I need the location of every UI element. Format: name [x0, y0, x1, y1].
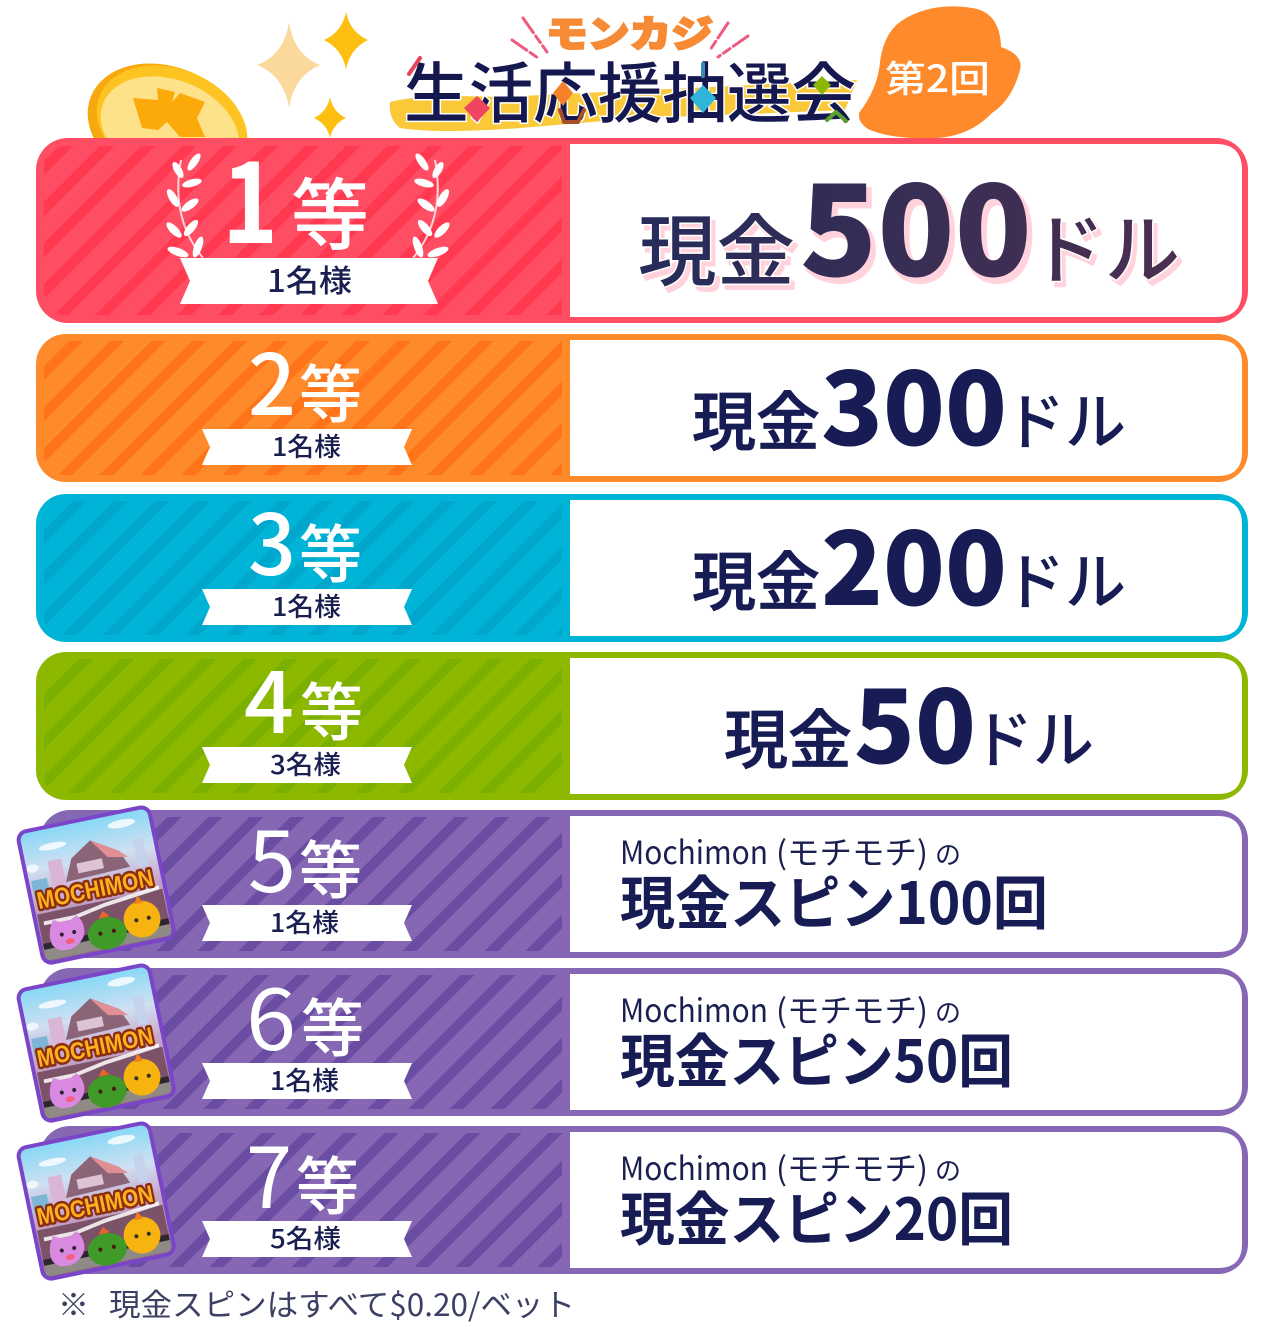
panel: 4th prize: 3名様: [270, 745, 341, 782]
panel: 4th prize: 50: [854, 647, 976, 792]
panel: 3rd prize: 200: [821, 489, 1007, 634]
game thumbnail: [17, 964, 175, 1122]
panel: 2nd prize: 2: [248, 319, 296, 440]
panel: 7th prize: の: [935, 1151, 961, 1188]
game thumbnail: [17, 806, 175, 964]
panel: 7th prize: 7: [246, 1112, 292, 1233]
panel: 1st prize: 1名様: [267, 256, 352, 301]
panel: 5th prize: 5: [248, 796, 296, 917]
prize: 500: [804, 137, 1036, 317]
panel: 5th prize: [17, 796, 1248, 964]
brush stroke behind title: [390, 80, 857, 131]
prize: ドル: [1030, 189, 1180, 299]
panel: 7th prize: Mochimon: [620, 1144, 768, 1190]
coin illustration: [88, 64, 248, 138]
panel: 3rd prize: 1名様: [272, 587, 341, 624]
footnote: ※: [58, 1280, 89, 1325]
panel: 7th prize: 現金スピン20回: [620, 1173, 1013, 1257]
panel: 4th prize: ドル: [972, 690, 1094, 780]
coloured accents on title strokes: [409, 58, 846, 122]
panel: 6th prize: Mochimon: [620, 986, 768, 1032]
panel: 3rd prize: ドル: [1004, 532, 1126, 622]
diamonds: [464, 96, 490, 122]
sparkles: [257, 12, 368, 138]
panel: 3rd prize: 現金: [692, 532, 820, 624]
panel: 6th prize: の: [935, 993, 961, 1030]
panel: 2nd prize: 等: [299, 345, 362, 436]
prize: ドル: [1034, 194, 1184, 304]
panel: 1st prize: [36, 115, 1248, 323]
panel: 2nd prize: [36, 319, 1248, 482]
panel: 5th prize: 1名様: [270, 903, 339, 940]
panel: 3rd prize: 3: [248, 479, 296, 600]
panel: 4th prize: 現金: [724, 690, 852, 782]
panel: 4th prize: [36, 637, 1248, 800]
panel: 5th prize: 現金スピン100回: [620, 857, 1048, 941]
panel: 2nd prize: 現金: [692, 372, 820, 464]
brand name: モンカジ: [546, 4, 713, 58]
panel: 5th prize: の: [935, 835, 961, 872]
game thumbnail: MOCHIMON: [35, 1181, 156, 1231]
panel: 6th prize: 等: [301, 979, 364, 1070]
prize: 現金: [638, 190, 795, 302]
panel: 6th prize: 1名様: [270, 1061, 339, 1098]
prize: 現金: [642, 195, 799, 307]
panel: 4th prize: 4: [244, 637, 294, 758]
rank: 1: [222, 115, 278, 275]
game thumbnail: MOCHIMON: [35, 865, 156, 915]
panel: 3rd prize: [36, 479, 1248, 642]
panel: 1st prize: 等: [291, 154, 369, 266]
panel: 2nd prize: 1名様: [272, 427, 341, 464]
panel: 6th prize: [17, 954, 1248, 1122]
panel: 6th prize: (モチモチ): [776, 986, 928, 1032]
game thumbnail: MOCHIMON: [35, 1023, 156, 1073]
rays: [512, 18, 748, 58]
panel: 7th prize: [17, 1112, 1248, 1280]
badge: round 2: 第2回: [885, 49, 990, 103]
panel: 7th prize: 5名様: [270, 1219, 341, 1256]
footnote: 現金スピンはすべて$0.20/ベット: [109, 1280, 575, 1325]
panel: 5th prize: (モチモチ): [776, 828, 928, 874]
panel: 6th prize: 現金スピン50回: [620, 1015, 1013, 1099]
prize: [638, 132, 1184, 317]
title text: 生活応援抽選会: [404, 41, 856, 137]
panel: 5th prize: 等: [299, 821, 362, 912]
panel: 2nd prize: ドル: [1004, 372, 1126, 462]
panel: 4th prize: 等: [300, 663, 363, 754]
prize: 500: [800, 132, 1032, 312]
panel: 5th prize: Mochimon: [620, 828, 768, 874]
laurel right: [410, 152, 452, 260]
ribbon: [180, 258, 438, 304]
panel: 3rd prize: 等: [299, 505, 362, 596]
title logo: [390, 4, 857, 137]
panel: 7th prize: (モチモチ): [776, 1144, 928, 1190]
game thumbnail: [17, 1122, 175, 1280]
panel: 7th prize: 等: [296, 1137, 359, 1228]
laurel left: [164, 152, 206, 260]
panel: 6th prize: 6: [246, 954, 296, 1075]
badge: round 2: [859, 6, 1021, 138]
panel: 2nd prize: 300: [821, 329, 1007, 474]
